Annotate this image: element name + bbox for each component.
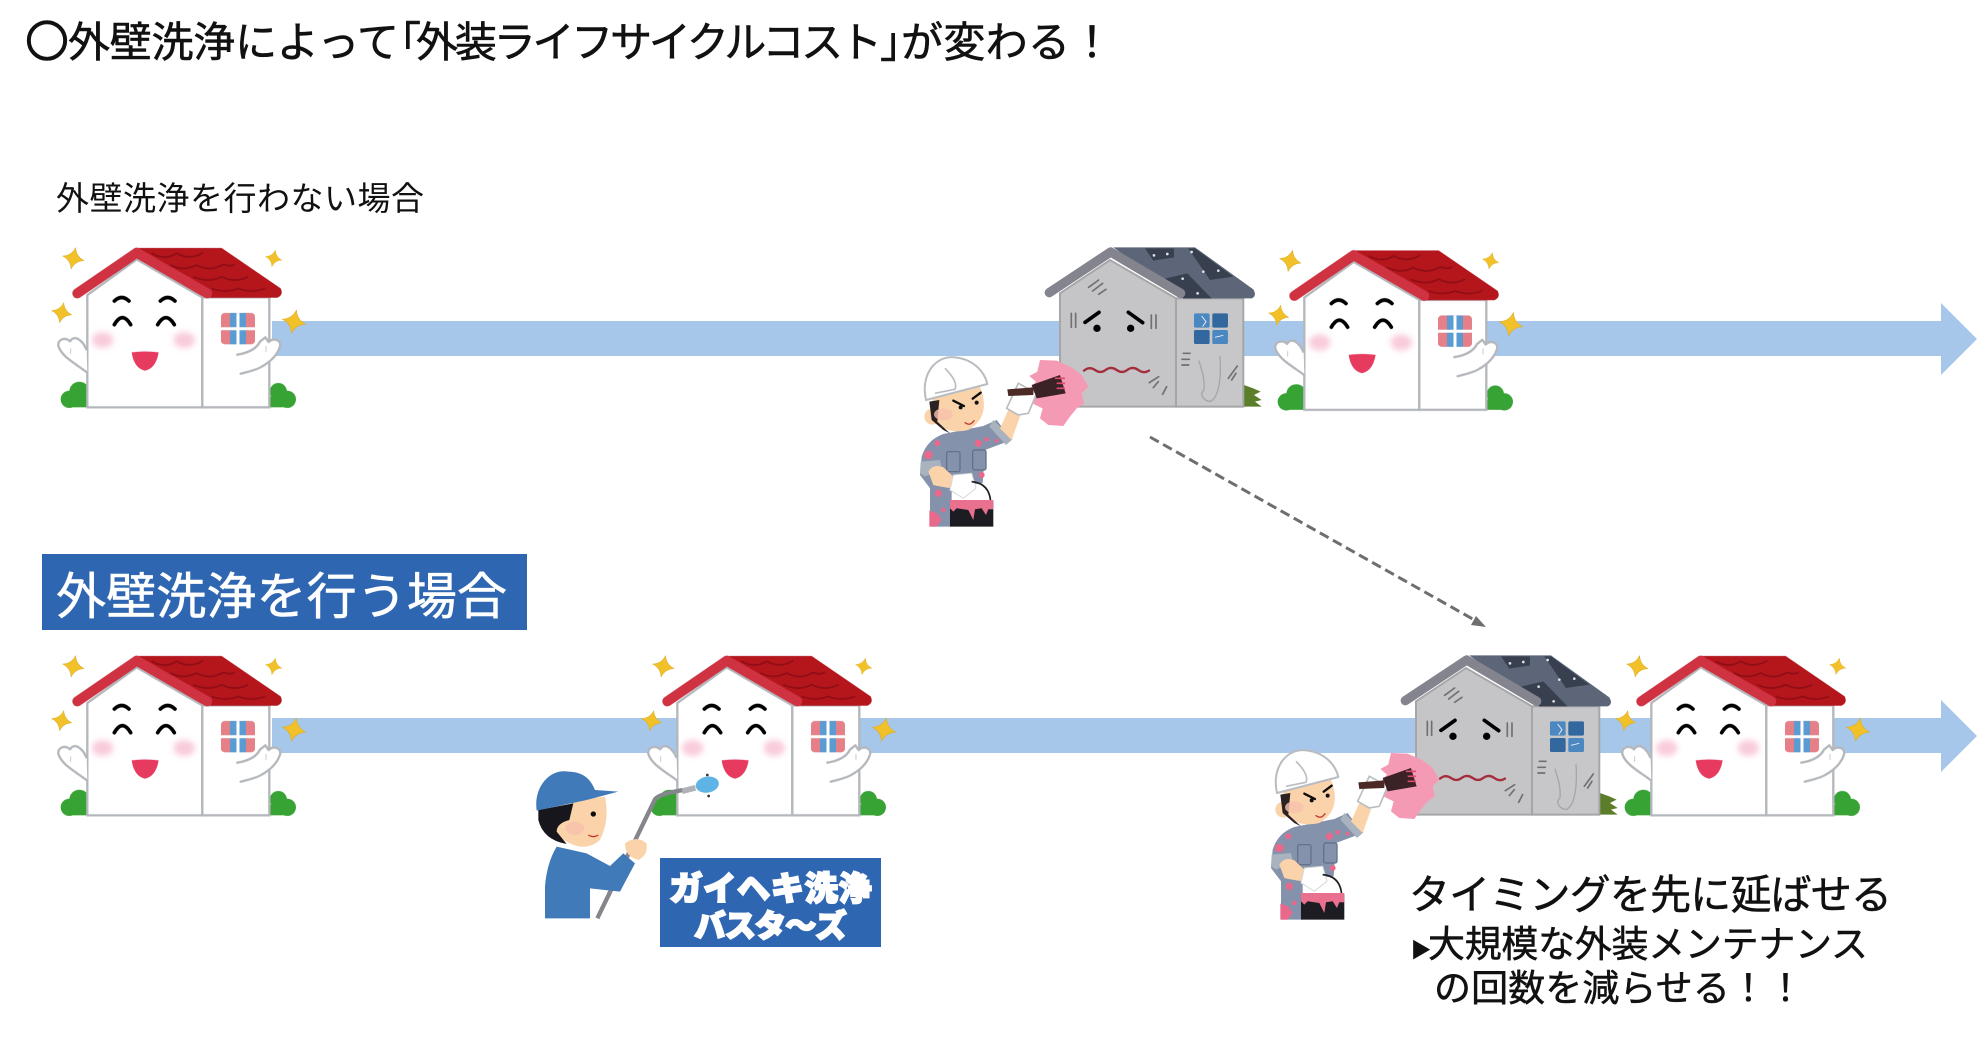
callout: benefit of postponed maintenance: タイミングを先に延ばせる xyxy=(1409,872,1892,918)
icon: repainted house xyxy=(1266,248,1525,410)
title: 〇 xyxy=(25,18,69,67)
logo: ガイヘキ洗浄バスターズ: ガイヘキ洗浄 xyxy=(670,870,872,907)
icon: worker with pressure washer xyxy=(536,771,720,918)
arrow: timeline with washing xyxy=(272,700,1977,772)
icon: repainted house xyxy=(1613,653,1872,816)
heading badge: with washing xyxy=(42,554,527,630)
icon: aged house xyxy=(1049,247,1262,407)
logo: ガイヘキ洗浄バスターズ xyxy=(660,858,881,947)
callout: benefit of postponed maintenance: 大規模な外装メンテナンス xyxy=(1428,924,1868,965)
panel: without exterior wall washing xyxy=(49,180,1977,527)
callout: benefit of postponed maintenance: の回数を減らせる！！ xyxy=(1434,968,1804,1009)
icon: clean house at start xyxy=(49,653,308,816)
subtitle: without washing: 外壁洗浄を行わない場合 xyxy=(56,180,424,217)
title: が変わる xyxy=(901,19,1070,66)
title: 「 xyxy=(379,19,421,66)
title: 外壁洗浄によって xyxy=(68,19,399,66)
icon: painter xyxy=(920,357,1088,527)
icon: painter xyxy=(1271,750,1439,920)
arrow: timeline without washing xyxy=(272,303,1977,375)
title: ！ xyxy=(1071,19,1113,66)
panel: with exterior wall washing xyxy=(42,554,1977,1009)
title xyxy=(25,18,1113,67)
icon: aged house later in time xyxy=(1405,655,1618,815)
callout: benefit of postponed maintenance: ▶ xyxy=(1411,940,1431,962)
heading badge: with washing: 外壁洗浄を行う場合 xyxy=(56,569,507,625)
icon: house being kept clean xyxy=(639,653,898,816)
title: 外装ライフサイクルコスト xyxy=(416,19,882,66)
icon: clean house at start xyxy=(49,245,308,408)
dashed arrow: maintenance timing shifts later xyxy=(1150,437,1486,627)
callout: benefit of postponed maintenance xyxy=(1409,872,1892,1009)
title: 」 xyxy=(880,19,922,66)
logo: ガイヘキ洗浄バスターズ: バスタ〜ズ xyxy=(694,909,846,944)
